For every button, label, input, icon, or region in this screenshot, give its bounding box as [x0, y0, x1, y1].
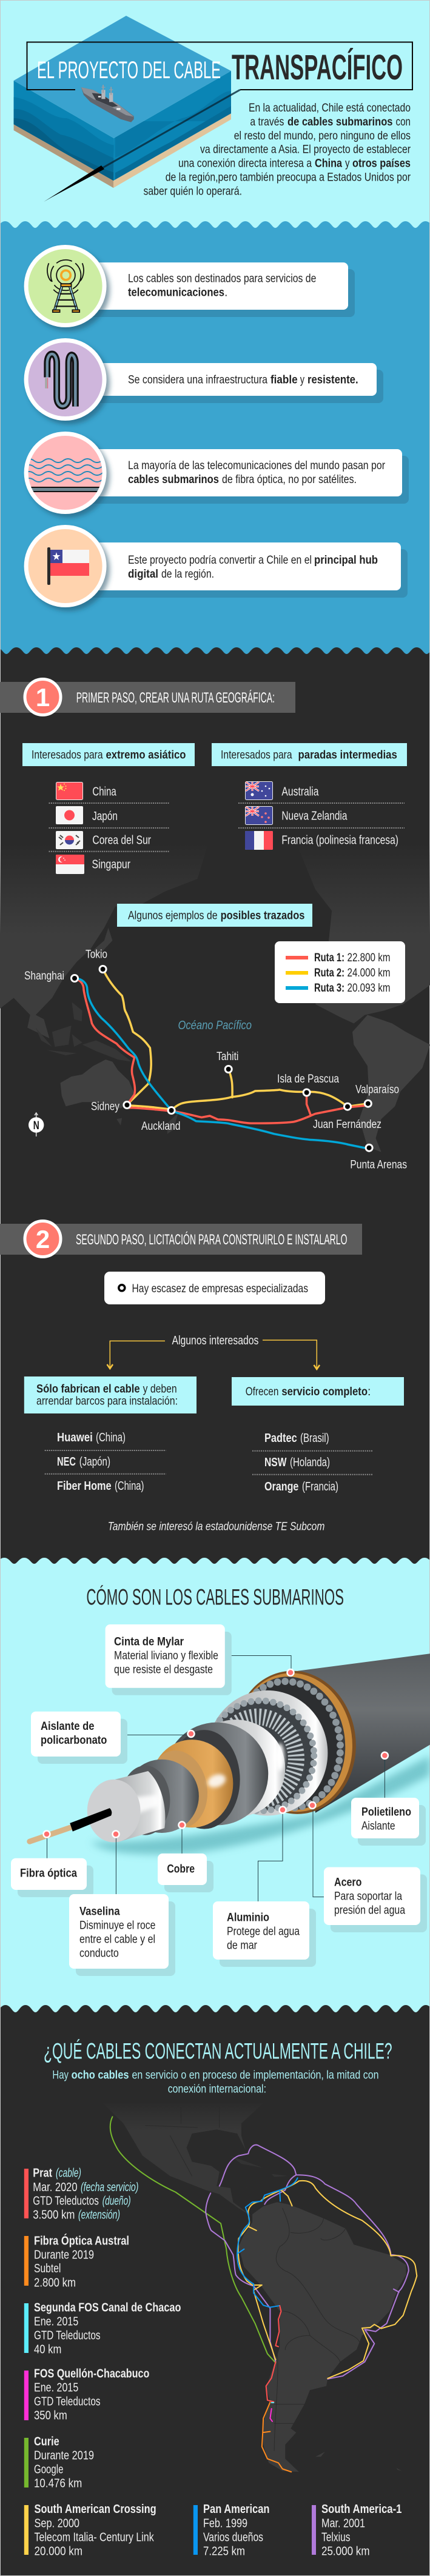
callout: Polietileno: [351, 1798, 426, 1846]
intro text block: y: [345, 157, 350, 170]
intro text block: de cables submarinos: [287, 115, 393, 128]
callout: Aislante de policarbonato: [31, 1712, 127, 1764]
title frame and cable line: [27, 42, 412, 202]
panel: fiable y resistente: fiable: [270, 373, 298, 387]
panel: fiable y resistente: Se considera una infraestructura: [128, 373, 267, 387]
list: full service: (Francia): [302, 1480, 338, 1493]
panel: telecomunicaciones: .: [224, 286, 227, 299]
cable: South America-1 purple: [206, 2145, 409, 2379]
leader lines: [47, 1656, 385, 1901]
callout: Cobre: Cobre: [167, 1863, 195, 1876]
note: TE Subcom: También se interesó la estadounidense TE Subcom: [108, 1520, 324, 1533]
intro text block: una conexión directa interesa a: [178, 157, 312, 170]
callout: Vaselina: conducto: [79, 1946, 119, 1960]
map labels: Tokio: [86, 948, 107, 961]
panel: paradas intermedias header: [212, 743, 407, 766]
panel: hub digital: [24, 525, 408, 611]
legend: Fibra Óptica Austral: 2.800 km: [34, 2276, 76, 2289]
cable: Fibra Óptica Austral orange: [262, 2402, 291, 2472]
legend: South American Crossing: 20.000 km: [34, 2545, 82, 2558]
intro text block: a través: [250, 115, 284, 128]
callout: Polietileno: Polietileno: [361, 1805, 411, 1818]
legend: routes: Ruta 1:: [314, 951, 344, 964]
list: full service: [252, 1432, 373, 1493]
panel: cables submarinos: cables submarinos: [128, 473, 219, 486]
legend: routes: Ruta 3:: [314, 981, 344, 995]
callout: Vaselina: [69, 1894, 175, 1976]
panel: sólo fabrican: Sólo fabrican el cable: [36, 1383, 140, 1396]
map: Americas with cables: [103, 2103, 417, 2472]
intro text block: [143, 101, 411, 198]
panel: telecomunicaciones: [24, 245, 355, 331]
legend: Prat: 3.500 km: [33, 2209, 75, 2222]
list: full service: NSW: [264, 1456, 287, 1469]
step 1 heading: 1: [36, 683, 50, 712]
list: full service: (Brasil): [300, 1432, 329, 1445]
list: Asian countries: [49, 782, 170, 874]
icon: ship: [81, 85, 134, 122]
list: intermediate stops: Francia (polinesia francesa): [281, 834, 398, 847]
panel: fiable y resistente: [24, 338, 383, 424]
legend: Curie: Curie: [34, 2435, 59, 2448]
callout: Fibra óptica: Fibra óptica: [20, 1867, 77, 1880]
list: manufacturers: (China): [96, 1431, 126, 1444]
legend: South American Crossing: Telecom Italia- Century Link: [34, 2531, 154, 2544]
icon: New Zealand flag: [245, 806, 273, 824]
header illustration: ocean block: [13, 16, 231, 188]
panel: extremo asiático header: Interesados para: [32, 749, 103, 762]
intro text block: saber quién lo operará.: [143, 185, 242, 198]
map labels: Isla de Pascua: [277, 1073, 339, 1086]
legend: Segunda FOS Canal de Chacao: 40 km: [34, 2343, 61, 2356]
list: manufacturers: NEC: [57, 1455, 76, 1469]
label: algunos interesados: Algunos interesados: [172, 1334, 258, 1347]
panel: posibles trazados heading: Algunos ejemplos de: [128, 909, 218, 923]
legend: Pan American: Varios dueños: [203, 2531, 263, 2544]
panel: hub digital: principal hub: [314, 553, 378, 567]
legend: Prat: Prat: [33, 2167, 52, 2180]
legend: Curie: Durante 2019: [34, 2449, 94, 2462]
icon: Australia flag: [245, 782, 273, 800]
map labels: Sidney: [91, 1101, 119, 1113]
map: world background: [0, 843, 430, 1152]
panel: hub digital: digital: [128, 567, 158, 581]
list: full service: Orange: [264, 1480, 298, 1493]
subheading: ocho cables: [72, 2068, 129, 2081]
legend: Segunda FOS Canal de Chacao: Segunda FOS Canal de Chacao: [34, 2301, 181, 2314]
cable: Curie green: [110, 2117, 275, 2363]
callout: Aislante de policarbonato: policarbonato: [41, 1733, 107, 1747]
map labels: Auckland: [141, 1120, 181, 1133]
legend: FOS Quellón-Chacabuco: FOS Quellón-Chacabuco: [34, 2367, 149, 2380]
legend: Fibra Óptica Austral: Fibra Óptica Austral: [34, 2233, 129, 2247]
list: intermediate stops: Australia: [281, 786, 319, 799]
panel: servicio completo: servicio completo: [281, 1385, 368, 1398]
legend: Prat: (fecha servicio): [81, 2181, 138, 2194]
list: manufacturers: (Japón): [79, 1455, 110, 1469]
icon: Chile flag: [47, 547, 89, 585]
legend: Prat: GTD Teleductos: [33, 2195, 99, 2208]
list: Asian countries: Singapur: [92, 858, 130, 872]
route 1 red: [75, 978, 368, 1123]
callout: Aluminio: de mar: [227, 1938, 257, 1952]
callout: Acero: Para soportar la: [334, 1890, 402, 1903]
legend: Prat: (dueño): [102, 2195, 131, 2208]
cable markers: [44, 1669, 388, 1838]
callout: Aluminio: Protege del agua: [227, 1925, 300, 1938]
list: full service: Padtec: [264, 1432, 297, 1445]
legend: routes: 22.800 km: [347, 951, 391, 964]
panel: extremo asiático header: extremo asiático: [106, 749, 186, 762]
step 1 heading: [0, 679, 295, 715]
panel: cables submarinos: de fibra óptica, no por satélites.: [222, 473, 357, 486]
list: manufacturers: (China): [115, 1480, 144, 1493]
map labels: Océano Pacífico: [178, 1019, 252, 1032]
legend: Segunda FOS Canal de Chacao: [24, 2301, 181, 2356]
legend: Curie: 10.476 km: [34, 2477, 82, 2490]
callout: Cobre: [158, 1854, 213, 1892]
legend: routes: Ruta 2:: [314, 966, 344, 979]
title: EL PROYECTO DEL CABLE: [37, 57, 221, 84]
legend: Curie: [24, 2435, 94, 2490]
map labels: Punta Arenas: [350, 1159, 407, 1172]
map labels: Shanghai: [24, 970, 64, 983]
legend: Pan American: 7.225 km: [203, 2545, 245, 2558]
legend: South America-1: South America-1: [321, 2503, 401, 2516]
panel: fiable y resistente: y: [300, 373, 304, 387]
cable: South American Crossing yellow: [238, 2181, 417, 2378]
panel: posibles trazados heading: posibles trazados: [221, 909, 305, 923]
chart: route lines: [75, 969, 369, 1149]
panel: extremo asiático header: [22, 743, 195, 766]
panel: cables submarinos: [24, 432, 409, 518]
legend: Pan American: [193, 2503, 269, 2558]
panel: servicio completo: Ofrecen: [246, 1385, 278, 1398]
icon: antenna tower: [47, 260, 84, 312]
callout: Vaselina: Vaselina: [79, 1904, 120, 1918]
legend: Segunda FOS Canal de Chacao: Ene. 2015: [34, 2315, 78, 2329]
cable: Prat red: [266, 2306, 281, 2402]
callout: Aislante de policarbonato: Aislante de: [41, 1720, 95, 1733]
panel: servicio completo: :: [368, 1385, 371, 1398]
panel: paradas intermedias header: Interesados para: [221, 749, 292, 762]
step 2 heading: 2: [36, 1225, 50, 1253]
panel: telecomunicaciones: telecomunicaciones: [128, 286, 224, 299]
list: manufacturers: Fiber Home: [57, 1480, 112, 1493]
panel: sólo fabrican: y deben: [143, 1383, 177, 1396]
panel: servicio completo: [232, 1377, 404, 1406]
subheading: en servicio o en proceso de implementación, la mitad con: [132, 2068, 378, 2081]
icon: folded cable: [45, 354, 75, 407]
legend: Prat: (extensión): [78, 2209, 120, 2222]
icon: South Korea flag: [56, 831, 83, 849]
arrow: right: [263, 1340, 320, 1369]
cable: FOS Quellón-Chacabuco pink: [270, 2409, 272, 2421]
list: full service: (Holanda): [290, 1456, 330, 1469]
callout: Acero: [324, 1867, 427, 1932]
list: Asian countries: Japón: [92, 810, 118, 823]
step 2 heading: [0, 1221, 362, 1257]
legend: Pan American: Feb. 1999: [203, 2517, 247, 2530]
map labels: Tahiti: [217, 1050, 238, 1063]
callout: Aluminio: [213, 1901, 316, 1967]
map labels: [24, 948, 407, 1172]
callout: Polietileno: Aislante: [361, 1820, 395, 1833]
panel: fiable y resistente: resistente.: [307, 373, 358, 387]
callout: Acero: Acero: [334, 1876, 361, 1889]
legend: South American Crossing: [24, 2503, 156, 2558]
panel: hub digital: Este proyecto podría convertir a Chile en el: [128, 553, 312, 567]
legend: Fibra Óptica Austral: Durante 2019: [34, 2249, 94, 2262]
list: manufacturers: Huawei: [57, 1431, 93, 1444]
icon: France flag: [245, 831, 273, 850]
map labels: Valparaíso: [355, 1084, 399, 1096]
callout: Vaselina: Disminuye el roce: [79, 1918, 155, 1932]
callout: Cinta de Mylar: que resiste el desgaste: [114, 1663, 213, 1676]
step 1 heading: PRIMER PASO, CREAR UNA RUTA GEOGRÁFICA:: [76, 690, 275, 706]
legend: FOS Quellón-Chacabuco: GTD Teleductos: [34, 2395, 101, 2408]
panel: posibles trazados heading: [117, 904, 312, 927]
cable: Segunda FOS cyan: [272, 2402, 274, 2403]
icon: Singapore flag: [56, 855, 84, 874]
legend: Prat: Mar. 2020: [33, 2181, 77, 2194]
arrow: left: [107, 1341, 165, 1369]
icon: waves and seabed cable: [28, 458, 102, 492]
callout: Cinta de Mylar: [106, 1624, 232, 1695]
route 2 yellow: [103, 969, 368, 1110]
subheading: [52, 2068, 378, 2095]
legend: South America-1: Telxius: [321, 2531, 351, 2544]
intro text block: China: [315, 157, 342, 170]
icon: compass north: [29, 1113, 44, 1136]
legend: FOS Quellón-Chacabuco: [24, 2367, 149, 2422]
subheading: Hay: [52, 2068, 69, 2081]
panel: paradas intermedias header: paradas intermedias: [298, 749, 397, 762]
callout: Cinta de Mylar: Material liviano y flexible: [114, 1649, 218, 1662]
intro text block: otros países: [352, 157, 411, 170]
title: [37, 48, 403, 87]
list: intermediate stops: [238, 782, 405, 850]
panel: sólo fabrican: [24, 1376, 197, 1413]
callout: Acero: presión del agua: [334, 1904, 405, 1917]
legend: routes: 24.000 km: [347, 966, 391, 979]
panel: telecomunicaciones: Los cables son destinados para servicios de: [128, 272, 316, 285]
legend: FOS Quellón-Chacabuco: Ene. 2015: [34, 2381, 78, 2395]
list: manufacturers: [45, 1431, 166, 1493]
subheading: conexión internacional:: [168, 2082, 266, 2095]
callout: Vaselina: entre el cable y el: [79, 1932, 155, 1946]
intro text block: con: [395, 115, 411, 128]
callout: Cinta de Mylar: Cinta de Mylar: [114, 1635, 184, 1649]
callout: escasez: Hay escasez de empresas especializadas: [132, 1282, 308, 1295]
legend: routes: [275, 941, 405, 1003]
icon: compass north: N: [33, 1119, 39, 1132]
legend: Fibra Óptica Austral: [24, 2233, 129, 2289]
list: intermediate stops: Nueva Zelandia: [281, 810, 348, 823]
legend: South America-1: Mar. 2001: [321, 2517, 365, 2530]
legend: South America-1: [312, 2503, 401, 2558]
legend: Prat: [24, 2167, 138, 2222]
legend: Segunda FOS Canal de Chacao: GTD Teleductos: [34, 2329, 101, 2342]
legend: Pan American: Pan American: [203, 2503, 269, 2516]
legend: FOS Quellón-Chacabuco: 350 km: [34, 2409, 67, 2422]
legend: South American Crossing: Sep. 2000: [34, 2517, 79, 2530]
list: Asian countries: Corea del Sur: [92, 834, 151, 847]
legend: Fibra Óptica Austral: Subtel: [34, 2262, 61, 2275]
legend: Curie: Google: [34, 2463, 63, 2476]
cable: Pan American blue: [237, 2178, 298, 2307]
legend: routes: 20.093 km: [347, 981, 391, 995]
map nodes: [72, 966, 372, 1151]
icon: Japan flag: [56, 806, 83, 824]
legend: Prat: (cable): [56, 2167, 81, 2180]
panel: sólo fabrican: arrendar barcos para instalación:: [36, 1395, 178, 1408]
icon: China flag: [56, 782, 82, 800]
legend: South American Crossing: South American Crossing: [34, 2503, 156, 2516]
callout: Fibra óptica: [11, 1858, 93, 1897]
panel: hub digital: de la región.: [161, 567, 214, 581]
callout: escasez: [104, 1272, 325, 1304]
list: Asian countries: China: [92, 786, 116, 799]
illustration: cable cross-section: [30, 1653, 430, 1854]
callout: Aluminio: Aluminio: [227, 1910, 269, 1924]
map labels: Juan Fernández: [313, 1118, 381, 1131]
legend: South America-1: 25.000 km: [321, 2545, 370, 2558]
route 3 blue: [75, 978, 369, 1149]
